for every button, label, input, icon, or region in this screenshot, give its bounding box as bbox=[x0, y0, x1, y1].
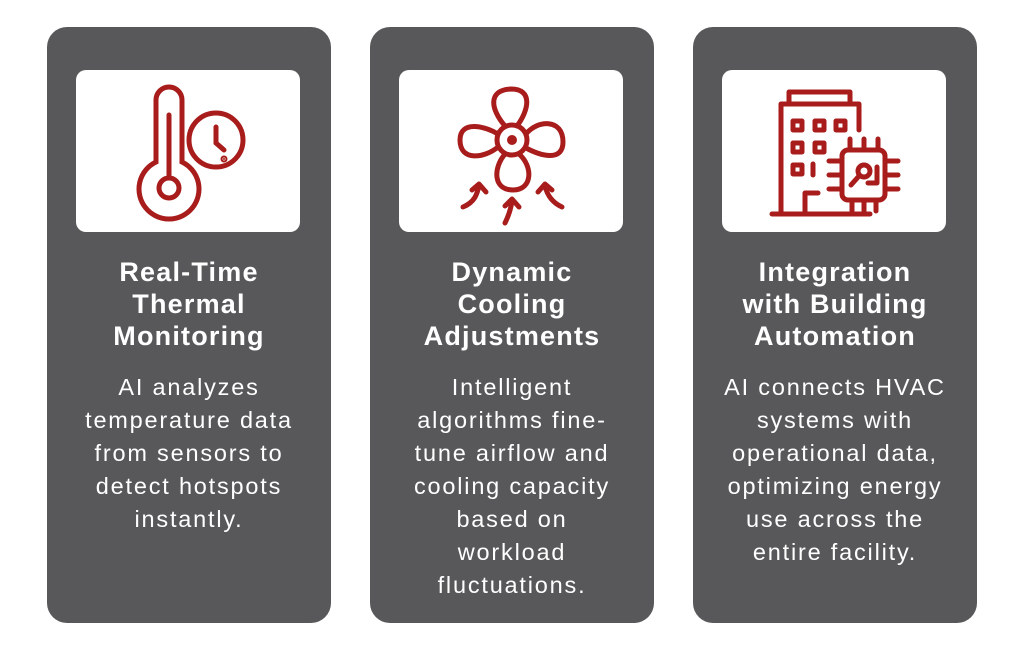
title bbox=[742, 257, 928, 351]
title: Dynamic bbox=[452, 257, 572, 287]
title: Integration bbox=[759, 257, 911, 287]
body text: operational data, bbox=[732, 440, 938, 466]
body text: AI connects HVAC bbox=[724, 374, 946, 400]
title: Monitoring bbox=[113, 321, 265, 351]
body text: systems with bbox=[757, 407, 913, 433]
body text: entire facility. bbox=[753, 539, 917, 565]
title bbox=[424, 257, 600, 351]
panel: integration with building automation bbox=[693, 27, 977, 623]
body text: algorithms fine- bbox=[417, 407, 607, 433]
title: Automation bbox=[754, 321, 916, 351]
title: Thermal bbox=[132, 289, 246, 319]
body text bbox=[724, 374, 946, 565]
body text: instantly. bbox=[134, 506, 244, 532]
body text: workload bbox=[458, 539, 566, 565]
body text: fluctuations. bbox=[438, 572, 586, 598]
body text bbox=[85, 374, 293, 532]
body text: cooling capacity bbox=[414, 473, 610, 499]
title bbox=[113, 257, 265, 351]
panel: dynamic cooling adjustments bbox=[370, 27, 654, 623]
body text: from sensors to bbox=[95, 440, 283, 466]
icon: fan with airflow arrows bbox=[399, 70, 623, 232]
body text: AI analyzes bbox=[118, 374, 260, 400]
panel: real-time thermal monitoring bbox=[47, 27, 331, 623]
body text: use across the bbox=[746, 506, 924, 532]
title: Adjustments bbox=[424, 321, 600, 351]
body text: detect hotspots bbox=[96, 473, 282, 499]
body text bbox=[414, 374, 610, 598]
title: Cooling bbox=[458, 289, 566, 319]
title: with Building bbox=[742, 289, 928, 319]
body text: optimizing energy bbox=[728, 473, 942, 499]
icon: thermometer with clock bbox=[76, 70, 300, 232]
body text: temperature data bbox=[85, 407, 293, 433]
body text: Intelligent bbox=[452, 374, 572, 400]
icon: building with chip bbox=[722, 70, 946, 232]
body text: based on bbox=[456, 506, 568, 532]
body text: tune airflow and bbox=[415, 440, 609, 466]
title: Real-Time bbox=[119, 257, 259, 287]
